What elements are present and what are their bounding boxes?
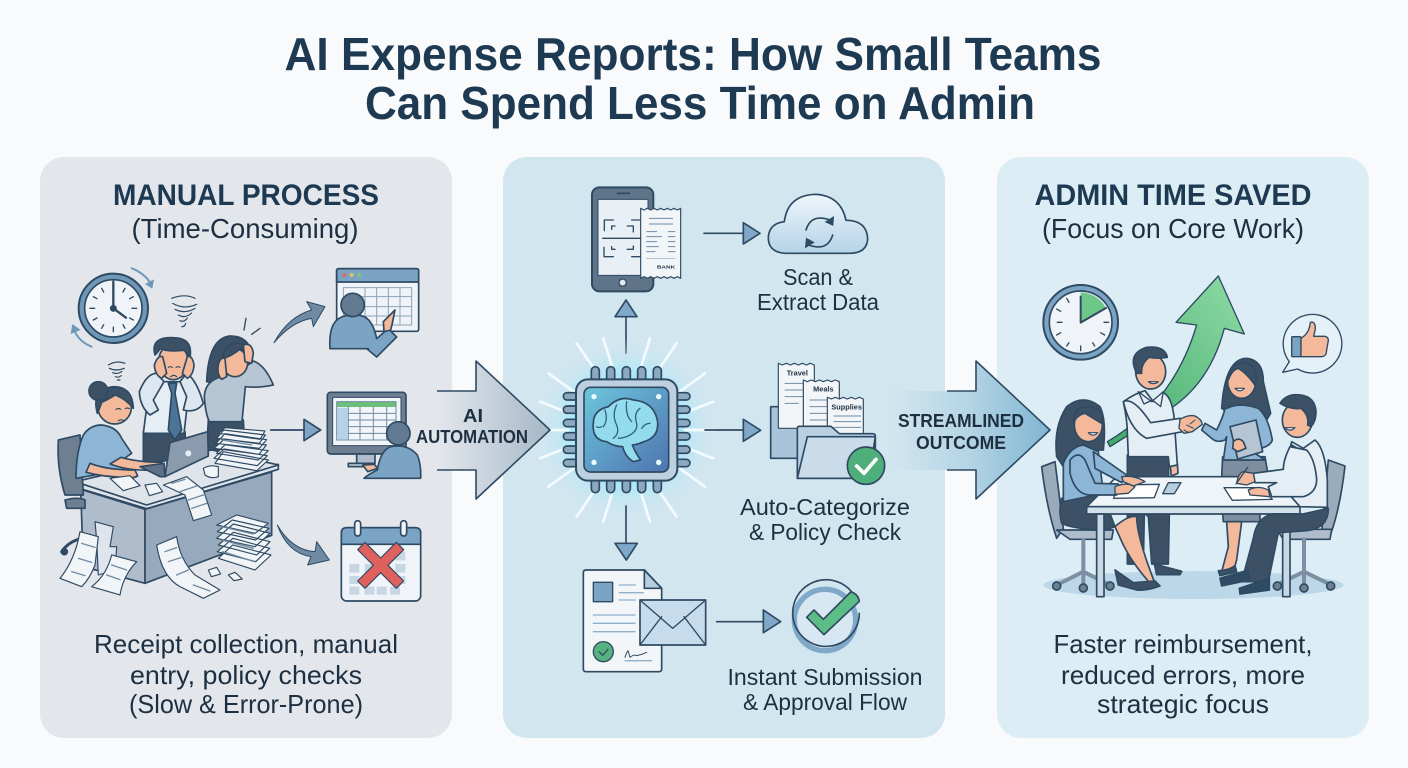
heading: admin time saved: (Focus on Core Work): [1042, 213, 1304, 244]
arms and legs: seated man: [1220, 447, 1328, 594]
arrow: to approval: [717, 610, 781, 633]
arrow: AI automation: AUTOMATION: [416, 427, 528, 447]
label: auto-categorize: [740, 494, 910, 545]
chair: right: [1273, 460, 1345, 592]
icon: categorized folders: Meals: [813, 384, 834, 393]
arrow: to cloud: [704, 223, 760, 244]
person: seated woman body: [1056, 400, 1115, 531]
text block: manual description: Receipt collection, manual: [94, 629, 398, 659]
heading: manual process: MANUAL PROCESS: [113, 179, 379, 212]
arrow: up from chip: [615, 300, 637, 353]
heading: manual process: [113, 179, 379, 244]
icon: clock with green wedge: [1043, 285, 1118, 360]
illustration: happy team meeting: [1042, 276, 1345, 599]
icon: stress swirls: [108, 296, 197, 380]
icon: calendar with red cross: [341, 521, 421, 601]
label: instant submission: [728, 664, 922, 715]
icon: thumbs up bubble: [1283, 314, 1342, 373]
arrow: up to data entry: [274, 302, 325, 343]
arrow: streamlined outcome: [890, 361, 1050, 499]
title: Can Spend Less Time on Admin: [365, 77, 1035, 129]
person: standing woman: [1202, 358, 1272, 576]
arrow: right to computer: [271, 419, 321, 441]
arms: seated woman: [1070, 452, 1145, 495]
text block: outcome description: reduced errors, more: [1061, 660, 1305, 690]
text block: outcome description: [1054, 629, 1312, 719]
arrow: streamlined outcome: OUTCOME: [916, 433, 1006, 453]
icon: clock with circular arrows: [71, 268, 154, 347]
label: scan and extract: [757, 264, 880, 315]
text block: outcome description: Faster reimbursement,: [1054, 629, 1312, 659]
arrow: down from chip: [615, 506, 637, 560]
chair: left: [1042, 462, 1114, 592]
label: scan and extract: Extract Data: [757, 289, 880, 315]
heading: manual process: (Time-Consuming): [132, 213, 358, 244]
icon: approval check: [793, 580, 859, 651]
icon: categorized folders: Supplies: [831, 402, 862, 411]
desk: [75, 450, 278, 583]
floor shadow: [1043, 571, 1343, 599]
icon: categorized folders: [771, 363, 885, 484]
legs: seated woman: [1115, 516, 1160, 590]
panel: AI automation flow: [503, 157, 945, 738]
arrow: AI automation: AI: [463, 406, 483, 426]
text block: manual description: entry, policy checks: [130, 660, 362, 690]
laptop: [140, 432, 208, 477]
paper stacks and receipts: [60, 428, 271, 598]
panel: admin time saved: [997, 157, 1369, 738]
icon: spreadsheet with person: [330, 269, 419, 357]
label: auto-categorize: Auto-Categorize: [740, 494, 910, 520]
person: woman holding head: [204, 318, 273, 450]
icon: AI chip with brain: [535, 338, 718, 522]
person: seated man body: [1280, 395, 1327, 507]
label: instant submission: & Approval Flow: [743, 689, 908, 715]
label: scan and extract: Scan &: [783, 264, 853, 290]
icon: categorized folders: Travel: [787, 368, 808, 377]
title: AI Expense Reports: How Small Teams: [284, 28, 1102, 80]
heading: admin time saved: [1034, 179, 1312, 244]
icon: phone scanning receipt: BANK: [657, 264, 676, 270]
text block: outcome description: strategic focus: [1097, 689, 1269, 719]
arrow: to folders: [705, 419, 761, 441]
icon: phone scanning receipt: [592, 187, 681, 291]
text block: manual description: (Slow & Error-Prone): [129, 689, 363, 719]
arrow: AI automation: [416, 361, 550, 499]
person: standing man: [1123, 347, 1183, 575]
person: woman at laptop: [58, 382, 163, 555]
illustration: stressed team at desk: [58, 268, 421, 601]
panel: manual process: [40, 157, 452, 738]
arrow: green growth: [1107, 276, 1244, 447]
table: [1087, 477, 1300, 597]
handshake: [1179, 416, 1202, 433]
icon: monitor with person: [327, 392, 421, 478]
title: [284, 28, 1102, 129]
heading: admin time saved: ADMIN TIME SAVED: [1034, 179, 1312, 212]
label: instant submission: Instant Submission: [728, 664, 922, 690]
icon: cloud sync: [768, 194, 868, 253]
text block: manual description: [94, 629, 398, 719]
person: man holding head: [139, 338, 203, 462]
arrow: down to missed deadline: [277, 525, 329, 565]
label: auto-categorize: & Policy Check: [749, 519, 901, 545]
icon: document and envelope: [583, 570, 706, 672]
arrow: streamlined outcome: STREAMLINED: [898, 411, 1024, 431]
